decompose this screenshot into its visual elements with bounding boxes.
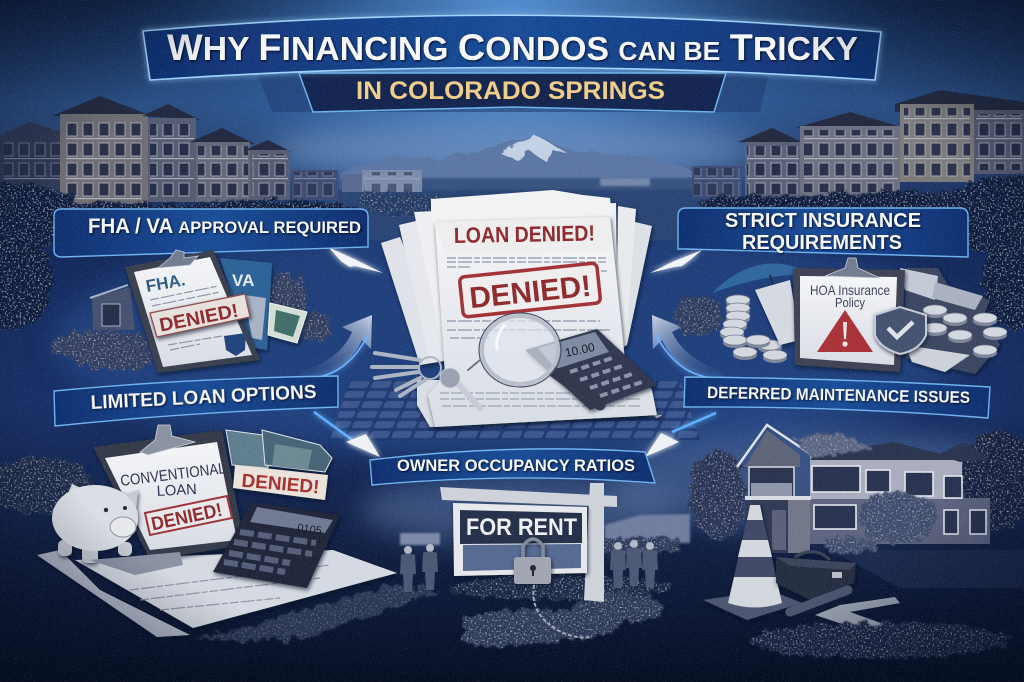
banner: strict insurance requirements	[678, 208, 968, 257]
money stack right	[900, 268, 1000, 374]
clipboard	[793, 268, 905, 372]
main sheet	[428, 217, 657, 427]
conventional loan heading: CONVENTIONAL	[119, 460, 227, 490]
sign picture	[463, 544, 581, 571]
subtitle ribbon: IN COLORADO SPRINGS	[356, 77, 665, 105]
arrow: limited loan options to owner occupancy	[314, 412, 380, 457]
arrow: deferred maintenance to owner occupancy	[645, 413, 716, 457]
banner: deferred maintenance issues	[684, 377, 990, 418]
for rent text: FOR RENT	[466, 514, 577, 541]
denied strip	[233, 465, 328, 500]
sign beam	[440, 487, 617, 507]
clip	[825, 258, 880, 278]
small house	[90, 285, 135, 330]
banner: FHA / VA approval required	[54, 209, 368, 257]
header strip	[435, 217, 611, 254]
banner: limited loan options	[54, 376, 338, 426]
banner: deferred maintenance issues: DEFERRED MAINTENANCE ISSUES	[707, 383, 970, 407]
curved arrow: lower left to center	[300, 315, 372, 378]
arrow: FHA banner to center	[328, 247, 383, 273]
valley and distant houses	[330, 170, 720, 240]
shrubs	[50, 275, 330, 370]
calculator	[213, 502, 340, 588]
clipboard	[93, 430, 245, 560]
banner: strict insurance requirements: REQUIREMENTS	[742, 232, 902, 254]
clip	[140, 425, 195, 455]
speckled ground	[750, 622, 1010, 658]
trees	[690, 430, 1024, 541]
road strip	[195, 585, 440, 640]
mountains	[340, 136, 700, 205]
people left	[400, 544, 438, 592]
keys	[372, 353, 480, 408]
shield check	[875, 307, 926, 354]
shrub	[674, 295, 722, 335]
magnifying glass	[479, 313, 600, 405]
dark tree lines	[0, 175, 1024, 330]
panel: FHA / VA denied clipboard: DENIED!	[158, 301, 240, 337]
hand tools	[790, 590, 900, 630]
denied strip	[150, 294, 250, 337]
umbrella	[712, 263, 813, 300]
shrubs at house	[822, 492, 938, 553]
panel: conventional loan denied desk: LOAN	[156, 481, 197, 500]
FHA heading: FHA.	[144, 270, 187, 296]
banner: limited loan options: LIMITED LOAN OPTIONS	[90, 382, 317, 414]
VA card: VA	[232, 271, 254, 290]
left condo buildings	[0, 96, 338, 204]
loan denied heading: LOAN DENIED!	[454, 221, 595, 248]
title text: WHY FINANCING CONDOS CAN BE TRICKY	[167, 27, 858, 68]
side papers	[755, 280, 800, 345]
warning triangle	[817, 310, 873, 352]
bushes front	[460, 594, 665, 647]
banner: owner occupancy ratios: OWNER OCCUPANCY RATIOS	[397, 457, 635, 475]
hedges	[450, 576, 670, 600]
sign post	[584, 483, 604, 602]
big paper	[37, 550, 397, 637]
piggy bank	[52, 484, 138, 563]
calculator	[525, 329, 657, 410]
panel: FHA / VA denied clipboard	[50, 250, 330, 373]
denied stamp	[145, 496, 232, 535]
panel: house with deferred maintenance	[690, 425, 1024, 658]
center stack of loan documents	[372, 190, 662, 427]
speckled foliage left	[0, 457, 95, 513]
curved arrow: lower right to center	[652, 315, 725, 378]
clip	[158, 250, 198, 268]
panel: HOA insurance cluster: Policy	[835, 295, 865, 310]
title banner	[143, 15, 881, 112]
house body	[737, 425, 990, 553]
banner: owner occupancy ratios	[370, 449, 655, 485]
document text lines	[440, 258, 640, 406]
toolbox	[776, 552, 856, 600]
panel: conventional loan denied desk	[0, 425, 440, 640]
padlock	[514, 539, 551, 584]
banner: strict insurance requirements: STRICT INSURANCE	[725, 210, 921, 232]
money bills	[226, 430, 332, 472]
traffic cone	[703, 505, 802, 620]
banner: FHA / VA approval required: FHA / VA APPROVAL REQUIRED	[88, 215, 361, 238]
seal	[224, 333, 246, 356]
panel: conventional loan denied desk: DENIED!	[241, 471, 320, 498]
house windows	[812, 466, 986, 534]
coins and notes by pig	[90, 552, 183, 575]
policy title: HOA Insurance	[810, 282, 890, 298]
road	[830, 550, 1024, 588]
arrow: insurance banner to center	[650, 250, 702, 273]
main ribbon	[143, 15, 881, 80]
sign board	[453, 503, 587, 576]
panel: for rent sign and people	[400, 483, 690, 647]
denied stamp: DENIED!	[468, 270, 593, 315]
right condo buildings	[692, 90, 1024, 198]
paving ground under documents	[330, 380, 700, 440]
calculator: 10.00	[564, 340, 596, 360]
VA card	[220, 258, 272, 350]
panel: conventional loan denied desk: DENIED!	[149, 500, 224, 535]
distant houses	[400, 514, 690, 554]
money note	[268, 303, 307, 343]
chain	[533, 585, 592, 638]
subtitle ribbon	[258, 73, 768, 112]
coins right	[923, 305, 1007, 358]
calculator: 0105	[297, 522, 322, 537]
people right	[610, 540, 658, 588]
back papers	[381, 190, 662, 427]
coins left	[720, 295, 787, 363]
clipboard	[125, 250, 260, 373]
panel: HOA insurance cluster	[674, 258, 1007, 374]
